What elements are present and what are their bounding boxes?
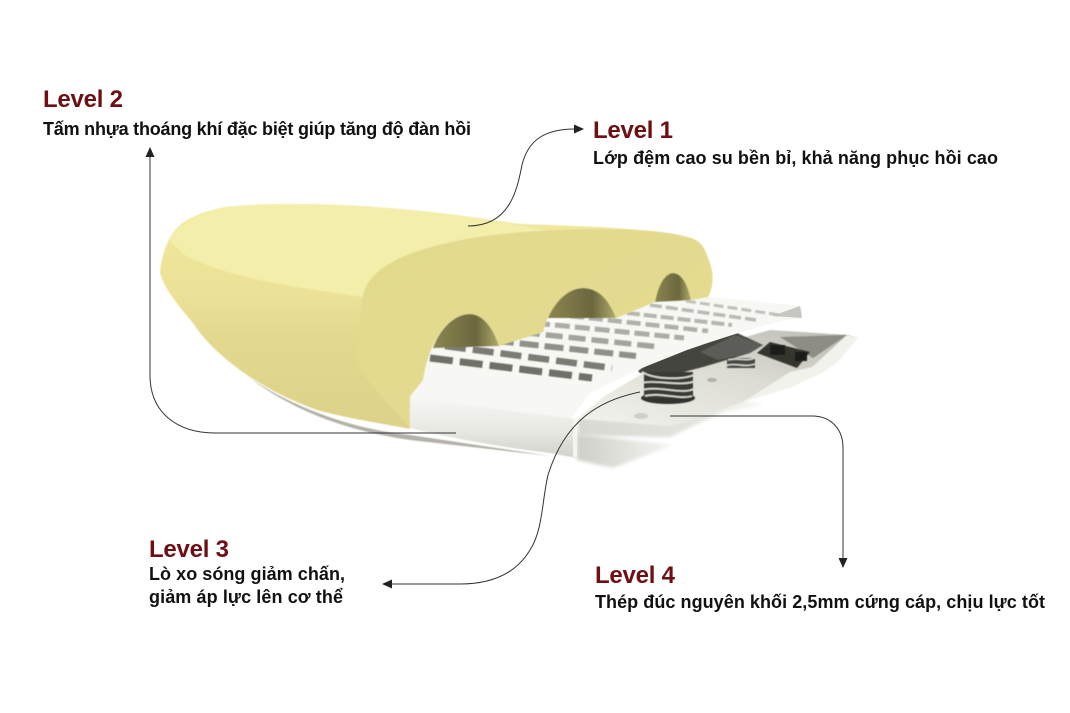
arrow: Level 2 connector [146, 147, 456, 433]
plate right end [772, 306, 802, 318]
foam cut face [356, 229, 712, 429]
text block: Level 1 [593, 117, 998, 168]
tray inner surface [578, 330, 857, 426]
text block: Level 1: Level 1 [593, 117, 673, 144]
level 3 wave springs and metal bracket [634, 333, 810, 419]
foam body [160, 204, 712, 429]
level 1 rubber foam layer [160, 204, 712, 429]
text block: Level 3: giảm áp lực lên cơ thể [149, 587, 343, 607]
arrow: Level 1 connector [468, 124, 584, 226]
text block: Level 2 [43, 86, 471, 139]
arch shadows [433, 314, 499, 348]
level 4 steel tray [577, 330, 858, 468]
small spring [727, 358, 755, 368]
text block: Level 3: Level 3 [149, 536, 229, 563]
rivets [634, 413, 648, 419]
text block: Level 3 [149, 536, 345, 607]
plate holes [430, 301, 780, 378]
text block: Level 1: Lớp đệm cao su bền bỉ, khả năng phục hồi cao [593, 148, 998, 168]
plate top surface [405, 296, 802, 420]
text block: Level 4: Level 4 [595, 562, 676, 589]
arrow: Level 4 connector [670, 416, 848, 568]
tray right rim [743, 335, 858, 402]
plate vertical edge [573, 419, 577, 457]
large spring [641, 392, 695, 404]
text block: Level 2: Tấm nhựa thoáng khí đặc biệt giúp tăng độ đàn hồi [43, 119, 471, 139]
steel bracket [638, 333, 763, 373]
tray underside [577, 434, 673, 468]
tray lip [578, 400, 765, 437]
level 2 ventilated plastic plate [405, 296, 802, 458]
base shadow under foam [248, 377, 550, 456]
plate front face [410, 396, 578, 458]
mattress cross-section illustration [160, 204, 858, 468]
foam top surface [170, 204, 550, 297]
text block: Level 3: Lò xo sóng giảm chấn, [149, 564, 345, 584]
text block: Level 4: Thép đúc nguyên khối 2,5mm cứng cáp, chịu lực tốt [595, 592, 1045, 612]
text block: Level 4 [595, 562, 1045, 612]
arrow: Level 3 connector [382, 392, 640, 588]
tray back panel [780, 335, 847, 358]
text block: Level 2: Level 2 [43, 86, 123, 113]
